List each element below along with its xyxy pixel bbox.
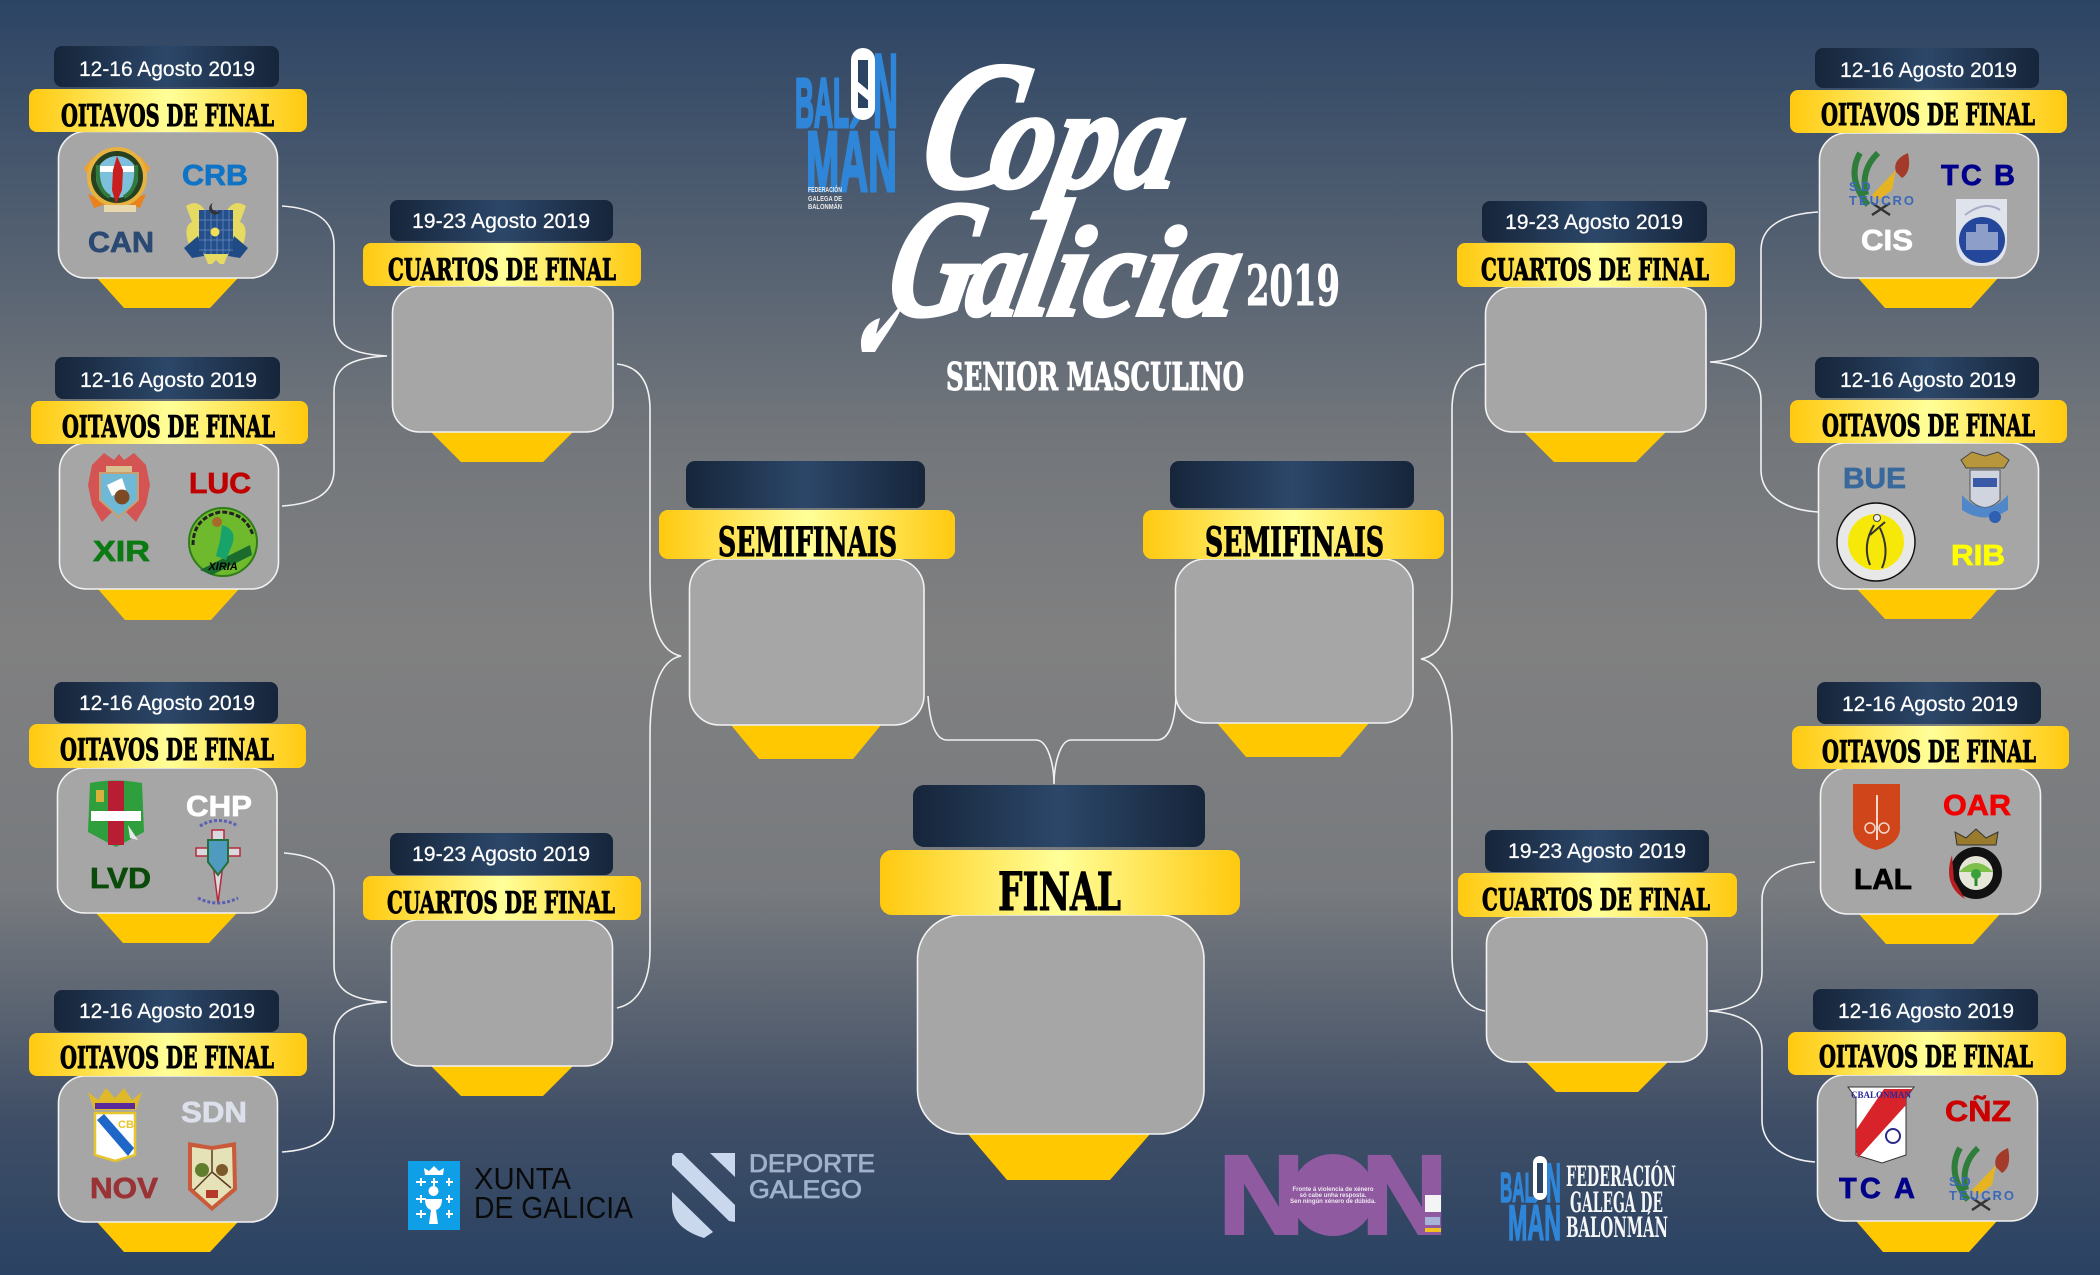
- crest: Cangas: [184, 203, 248, 264]
- date: 19-23 Agosto 2019: [412, 843, 590, 866]
- gold bar: [1143, 510, 1444, 559]
- date: 19-23 Agosto 2019: [1508, 840, 1686, 863]
- date bar: [1485, 830, 1709, 872]
- label: CIS: CIS: [1861, 225, 1913, 257]
- date bar: [390, 833, 613, 875]
- crest: Teucro: [1849, 153, 1914, 215]
- result box: [1818, 443, 2038, 589]
- title: Copa Galicia: a: [956, 201, 1040, 343]
- date bar: [54, 682, 278, 723]
- trophy tab: [97, 278, 238, 308]
- panel: cuartos left 1: [363, 200, 641, 462]
- gold bar: [29, 724, 306, 768]
- date bar: [54, 46, 279, 87]
- panel: oitavos right 1: [1790, 48, 2067, 308]
- logo: Xunta de Galicia: XUNTA: [474, 1161, 571, 1196]
- logo: NON campaign: N: [1362, 1134, 1447, 1257]
- crest: Cisne: [1956, 199, 2007, 266]
- result box: [690, 559, 924, 725]
- date bar: [913, 785, 1205, 847]
- date: 19-23 Agosto 2019: [1505, 211, 1683, 234]
- gold bar: [659, 510, 955, 559]
- label: TC A: TC A: [1839, 1173, 1915, 1205]
- panel: cuartos right 1: [1457, 201, 1735, 462]
- result box: [1818, 1075, 2038, 1221]
- logo: Federación Galega de Balonmán top: GALEGA DE: [808, 194, 842, 203]
- label: NOV: NOV: [90, 1173, 159, 1205]
- logo: NON campaign: Sen ningún xénero de dúbida.: [1290, 1199, 1376, 1205]
- year: 2019: [1246, 253, 1340, 318]
- crest: Cañiza: CBALONMAN: [1851, 1090, 1911, 1100]
- label: CÑZ: CÑZ: [1945, 1094, 2011, 1128]
- heading: OITAVOS DE FINAL: [60, 1041, 274, 1076]
- flag icon: [408, 1161, 460, 1230]
- result box: [392, 920, 612, 1066]
- label: BUE: BUE: [1843, 463, 1906, 495]
- crest: Teucro: S.D: [1849, 179, 1871, 194]
- text: N: [873, 33, 898, 150]
- date bar: [1170, 461, 1414, 508]
- logo: NON campaign: só cabe unha resposta.: [1300, 1193, 1367, 1199]
- swash tail of G: [861, 300, 905, 352]
- date bar: [1817, 682, 2041, 724]
- title: Copa Galicia: opa: [978, 59, 1200, 219]
- logo: Federación Galega de Balonmán bottom: [1500, 1151, 1676, 1251]
- panel: oitavos right 3: [1792, 682, 2069, 944]
- label: LUC: LUC: [189, 468, 251, 500]
- panel: oitavos right 4: [1788, 989, 2066, 1252]
- panel: oitavos right 2: [1790, 357, 2067, 619]
- text: MÁN: [806, 115, 897, 210]
- trophy tab: [1857, 589, 1998, 619]
- panel: oitavos left 1: [29, 46, 307, 308]
- crest: Ribeiro: [1837, 503, 1915, 581]
- date bar: [1482, 201, 1707, 242]
- trophy tab: [97, 1222, 238, 1252]
- label: TC B: TC B: [1941, 160, 2015, 192]
- heading: SEMIFINAIS: [718, 519, 897, 566]
- result box: [1176, 559, 1413, 723]
- result box: [918, 915, 1204, 1134]
- date: 12-16 Agosto 2019: [1842, 693, 2018, 716]
- trophy tab: [1524, 432, 1666, 462]
- gold bar: [1790, 400, 2067, 443]
- result box: [392, 286, 613, 432]
- logo: Federación Galega de Balonmán bottom: MÁN: [1508, 1195, 1561, 1251]
- crest: Seis do Nadal: CB: [118, 1119, 134, 1131]
- date: 12-16 Agosto 2019: [1840, 369, 2016, 392]
- heading: CUARTOS DE FINAL: [1481, 253, 1709, 288]
- date: 12-16 Agosto 2019: [1840, 59, 2017, 82]
- logo: Federación Galega de Balonmán top: BAL: [795, 64, 849, 142]
- title: Copa Galicia: [861, 25, 1255, 352]
- gold bar: [29, 1033, 307, 1076]
- trophy tab: [968, 1134, 1150, 1180]
- label: RIB: RIB: [1951, 540, 2005, 572]
- date: 12-16 Agosto 2019: [79, 58, 255, 81]
- logo: Federación Galega de Balonmán bottom: FEDERACIÓN: [1566, 1159, 1676, 1193]
- heading: SEMIFINAIS: [1205, 519, 1384, 566]
- crest: Teucro: TEUCRO: [1849, 193, 1914, 208]
- logo: Federación Galega de Balonmán bottom: BAL: [1500, 1164, 1535, 1211]
- date bar: [686, 461, 925, 508]
- result box: [58, 768, 277, 913]
- result box: [1486, 287, 1706, 432]
- logo: Xunta de Galicia: [408, 1161, 633, 1230]
- gold bar: [363, 243, 641, 286]
- trophy tab: [731, 725, 881, 759]
- crest: Cañiza: [1848, 1087, 1914, 1163]
- logo: Federación Galega de Balonmán bottom: GALEGA DE: [1570, 1186, 1663, 1219]
- panel: oitavos left 2: [31, 357, 308, 620]
- label: CAN: CAN: [88, 227, 154, 259]
- date bar: [1815, 48, 2039, 88]
- crest: Teucro: [1949, 1148, 2014, 1210]
- label: CRB: CRB: [182, 160, 248, 192]
- date: 12-16 Agosto 2019: [1838, 1000, 2014, 1023]
- heading: CUARTOS DE FINAL: [388, 253, 616, 288]
- crest: Novás: [188, 1142, 237, 1211]
- title: Copa Galicia: icia: [1039, 201, 1255, 343]
- panel: semifinal left: [659, 461, 955, 759]
- result box: [1486, 917, 1707, 1062]
- gold bar: [1792, 726, 2069, 769]
- logo: NON campaign: [1219, 1134, 1447, 1257]
- trophy tab: [1217, 723, 1369, 757]
- gold bar: [29, 89, 307, 132]
- date bar: [55, 357, 280, 399]
- logo: Federación Galega de Balonmán top: [795, 33, 898, 211]
- date bar: [1815, 357, 2039, 398]
- connector lines: [282, 206, 1818, 1162]
- result box: [1820, 768, 2040, 914]
- logo: Federación Galega de Balonmán bottom: N: [1546, 1151, 1561, 1214]
- crest: Chapela: [88, 780, 144, 847]
- heading: CUARTOS DE FINAL: [1482, 883, 1710, 918]
- panel: semifinal right: [1143, 461, 1444, 757]
- panel: cuartos right 2: [1458, 830, 1737, 1092]
- logo: Federación Galega de Balonmán top: BALONMÁN: [808, 202, 842, 211]
- panel: oitavos left 3: [29, 682, 306, 943]
- result box: [60, 443, 278, 589]
- label: LAL: LAL: [1854, 864, 1912, 896]
- heading: OITAVOS DE FINAL: [62, 410, 275, 445]
- gold bar: [31, 401, 308, 444]
- logo: Federación Galega de Balonmán bottom: BALONMÁN: [1566, 1211, 1668, 1244]
- title: Copa Galicia: G: [874, 167, 1002, 352]
- heading: OITAVOS DE FINAL: [61, 99, 274, 134]
- title: Copa Galicia: l: [1004, 167, 1082, 352]
- date bar: [54, 990, 279, 1032]
- trophy tab: [1858, 278, 1998, 308]
- title: Copa Galicia: C: [906, 25, 1043, 228]
- crest: OAR: [1853, 784, 1900, 850]
- logo: NON campaign: N: [1219, 1134, 1304, 1257]
- crest: Lalín: [1949, 829, 2002, 899]
- gold bar: [1788, 1032, 2066, 1075]
- date: 12-16 Agosto 2019: [79, 1000, 255, 1023]
- panel: oitavos left 4: [29, 990, 307, 1252]
- crest: Calasanz cross: [196, 820, 240, 903]
- heading: OITAVOS DE FINAL: [60, 733, 274, 768]
- gold bar: [1457, 243, 1735, 287]
- logo: NON campaign: Fronte á violencia de xénero: [1292, 1187, 1374, 1193]
- date: 19-23 Agosto 2019: [412, 210, 590, 233]
- logo: Xunta de Galicia: DE GALICIA: [474, 1190, 633, 1225]
- panel: cuartos left 2: [363, 833, 641, 1096]
- heading: CUARTOS DE FINAL: [387, 886, 615, 921]
- gold bar: [1458, 873, 1737, 917]
- trophy tab: [1859, 914, 2000, 944]
- panel: final: [880, 785, 1240, 1180]
- trophy tab: [98, 589, 239, 620]
- gold bar: [363, 876, 641, 920]
- crest: Xiria: [189, 508, 257, 576]
- label: CHP: CHP: [186, 791, 252, 823]
- logo: Deporte Galego: DEPORTE: [749, 1150, 875, 1178]
- gold bar: [1790, 90, 2067, 133]
- date: 12-16 Agosto 2019: [80, 369, 257, 392]
- crest: Teucro: TEUCRO: [1949, 1188, 2014, 1203]
- trophy tab: [1856, 1221, 1997, 1252]
- label: OAR: OAR: [1943, 790, 2011, 822]
- logo: Deporte Galego: GALEGO: [749, 1176, 862, 1204]
- label: SDN: SDN: [181, 1097, 247, 1129]
- trophy tab: [1526, 1062, 1668, 1092]
- crest: Bueu: [1961, 452, 2009, 523]
- logo: Deporte Galego: [672, 1150, 875, 1238]
- trophy tab: [431, 1066, 573, 1096]
- result box: [58, 132, 278, 278]
- label: XIR: XIR: [93, 536, 150, 568]
- label: LVD: LVD: [90, 863, 151, 895]
- ball letter O: [851, 48, 875, 120]
- gold bar: [880, 850, 1240, 915]
- date: 12-16 Agosto 2019: [79, 692, 255, 715]
- crest: Lucenses: [88, 453, 150, 522]
- crest: Carballal: [84, 147, 150, 212]
- trophy tab: [96, 913, 237, 943]
- trophy tab: [431, 432, 573, 462]
- logo: Federación Galega de Balonmán top: FEDERACIÓN: [808, 185, 842, 194]
- crest: Seis do Nadal: [88, 1088, 142, 1161]
- date bar: [390, 200, 613, 241]
- result box: [1820, 133, 2038, 278]
- heading: FINAL: [998, 862, 1121, 923]
- crest: Teucro: S.D: [1949, 1174, 1971, 1189]
- result box: [58, 1076, 278, 1222]
- date bar: [1813, 989, 2038, 1030]
- subtitle: SENIOR MASCULINO: [946, 354, 1244, 399]
- crest: Xiria: XIRIA: [207, 561, 238, 573]
